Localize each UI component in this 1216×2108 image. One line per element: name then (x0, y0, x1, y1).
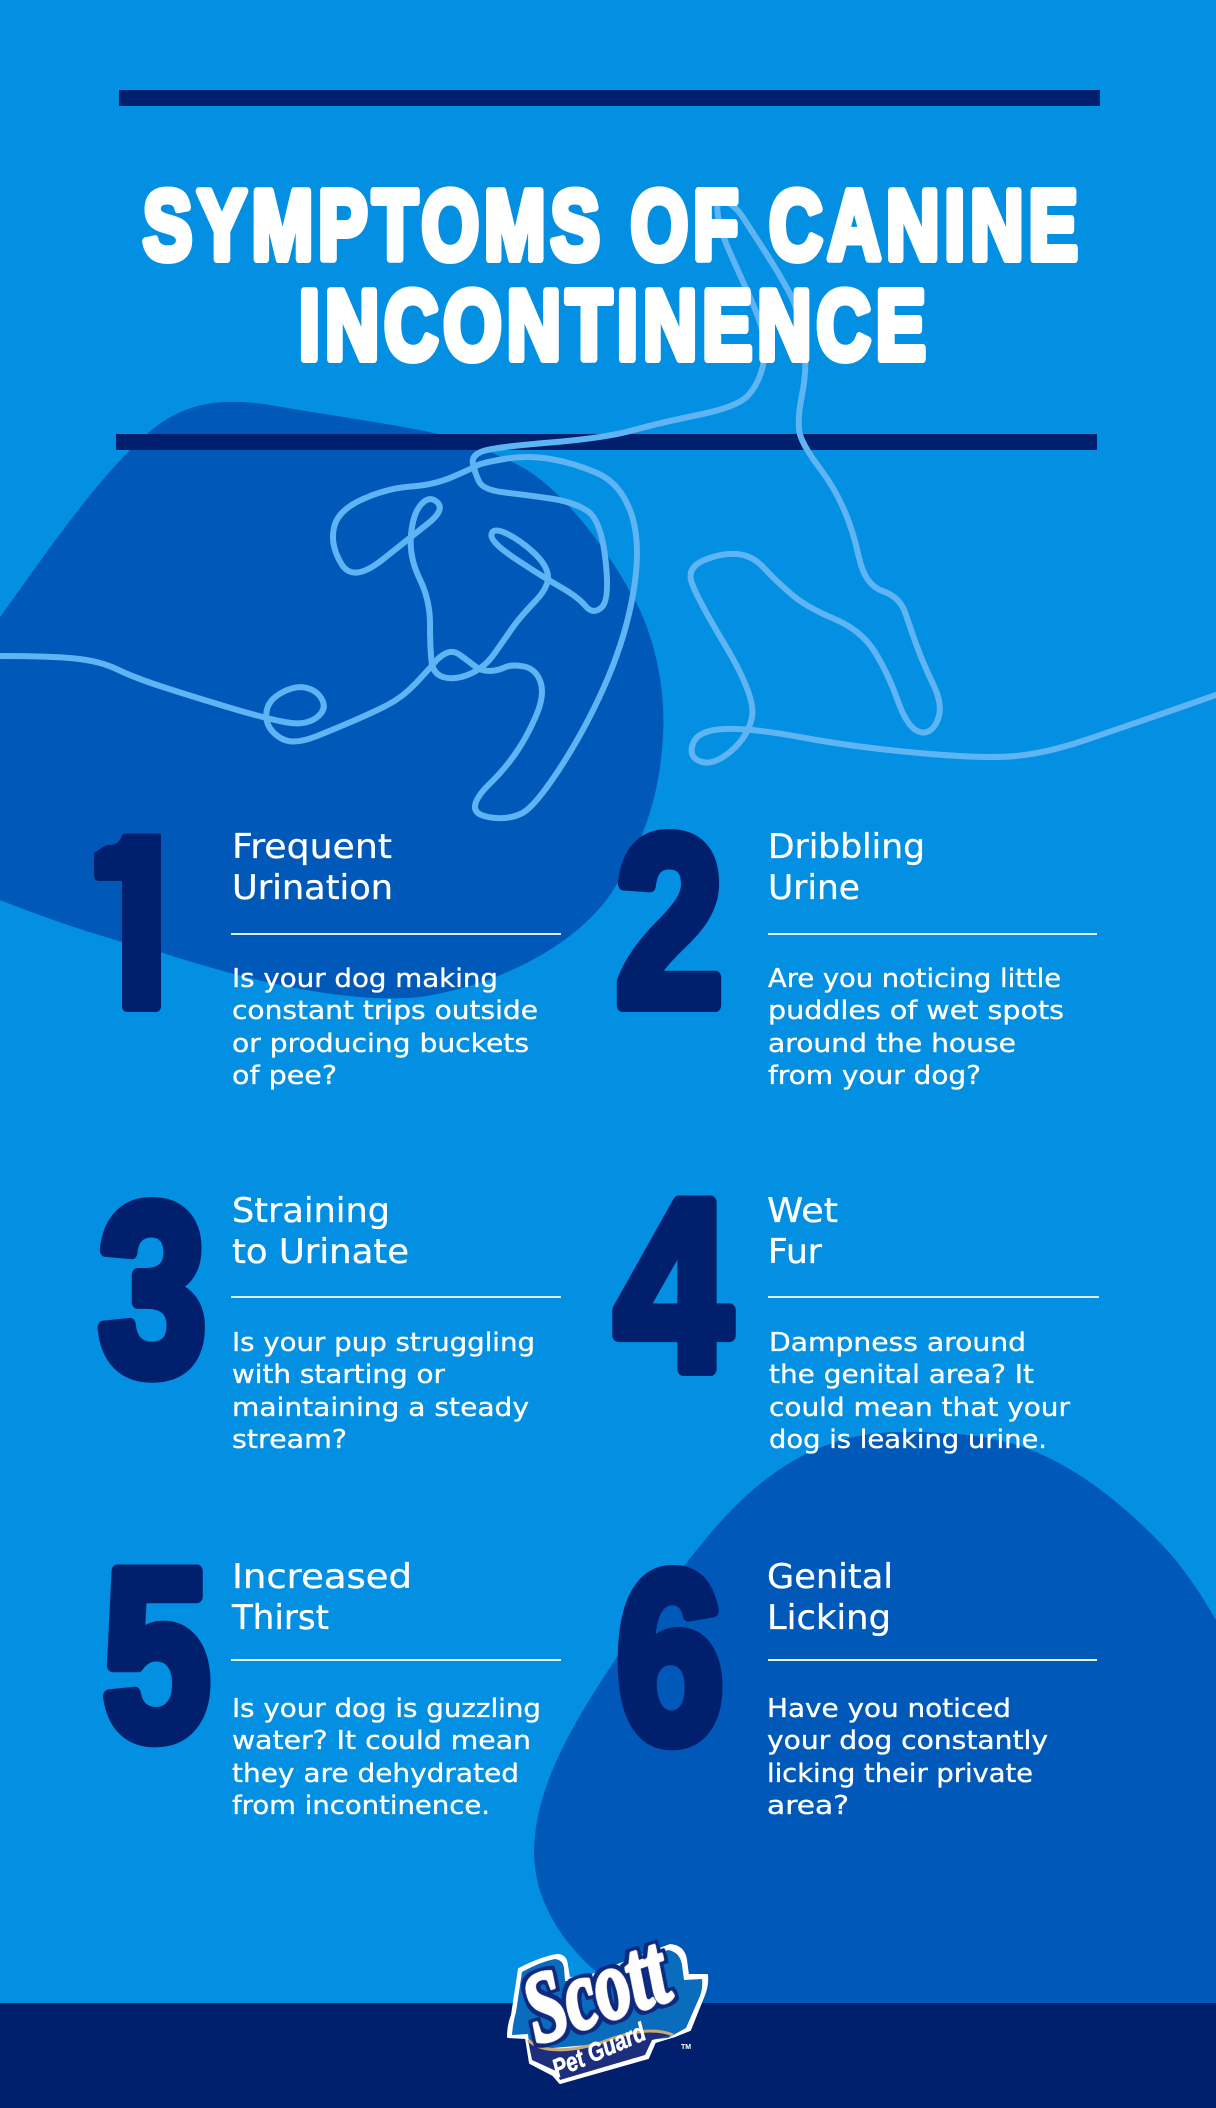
heading 6: Genital (767, 1557, 893, 1597)
body 3: stream? (232, 1425, 347, 1455)
heading 5: Increased (232, 1557, 412, 1597)
body 2: around the house (768, 1029, 1016, 1059)
blob: lower right background shape (534, 1432, 1216, 2010)
body 6: Have you noticed (767, 1694, 1011, 1724)
dog line illustration (0, 201, 1216, 818)
panel: symptom 4 (615, 1150, 1099, 1455)
body 1: of pee? (232, 1061, 337, 1091)
heading 6: Licking (767, 1598, 891, 1638)
body 2: Are you noticing little (768, 964, 1061, 994)
bottom title bar (116, 434, 1097, 450)
body 3: with starting or (232, 1360, 445, 1390)
title: INCONTINENCE (299, 270, 931, 380)
heading 5 (231, 1557, 412, 1638)
heading 4: Wet (767, 1191, 838, 1231)
body 1 (232, 964, 538, 1091)
logo swoosh (528, 2031, 673, 2080)
heading 2: Dribbling (768, 827, 925, 867)
heading 3: to Urinate (232, 1232, 409, 1272)
heading 5: Thirst (231, 1598, 329, 1638)
panel: symptom 2 (616, 787, 1097, 1091)
body 2: from your dog? (768, 1061, 981, 1091)
body 4: Dampness around (769, 1328, 1026, 1358)
body 5: from incontinence. (232, 1791, 490, 1821)
heading 6 (767, 1557, 893, 1638)
panel: symptom 1 (94, 832, 561, 1090)
panel: symptom 5 (103, 1520, 561, 1821)
body 4: the genital area? It (769, 1360, 1034, 1390)
logo gold curve (528, 2031, 673, 2050)
logo wordmark: Scott (509, 1913, 684, 2065)
title (143, 170, 1083, 380)
body 6: your dog constantly (767, 1726, 1048, 1756)
body 1: or producing buckets (232, 1029, 529, 1059)
body 3: Is your pup struggling (232, 1328, 535, 1358)
heading 2 (768, 827, 925, 908)
body 3: maintaining a steady (232, 1393, 529, 1423)
footer band (0, 2003, 1216, 2108)
body 6: licking their private (767, 1759, 1033, 1789)
heading 4: Fur (768, 1232, 822, 1272)
body 6: area? (767, 1791, 849, 1821)
body 5 (232, 1694, 541, 1821)
body 4 (769, 1328, 1070, 1455)
heading 2: Urine (768, 868, 860, 908)
number 2: 2 (616, 787, 723, 1057)
body 5: water? It could mean (232, 1726, 531, 1756)
heading 3: Straining (232, 1191, 390, 1231)
body 6 (767, 1694, 1048, 1821)
body 1: constant trips outside (232, 996, 538, 1026)
body 1: Is your dog making (232, 964, 498, 994)
number 1: 1 (68, 789, 202, 1059)
logo ribbon outline (508, 1945, 707, 2083)
logo: Scott Pet Guard (508, 1913, 707, 2084)
number 3: 3 (99, 1155, 206, 1425)
panel: symptom 6 (616, 1523, 1097, 1821)
body 4: could mean that your (769, 1393, 1070, 1423)
heading 3 (232, 1191, 409, 1272)
logo sub wordmark: Pet Guard (547, 2016, 651, 2084)
heading 1 (232, 827, 393, 908)
body 5: Is your dog is guzzling (232, 1694, 541, 1724)
body 4: dog is leaking urine. (769, 1425, 1047, 1455)
number 5: 5 (103, 1520, 210, 1790)
heading 4 (767, 1191, 838, 1272)
panel: symptom 3 (99, 1155, 561, 1455)
trademark: TM (681, 2044, 691, 2051)
body 2: puddles of wet spots (768, 996, 1064, 1026)
number 6: 6 (616, 1523, 724, 1793)
top title bar (119, 90, 1100, 106)
heading 1: Frequent (232, 827, 392, 867)
blob: upper left background shape (0, 402, 663, 998)
body 2 (768, 964, 1064, 1091)
number 4: 4 (615, 1150, 731, 1420)
logo ribbon body (512, 1950, 702, 2050)
body 5: they are dehydrated (232, 1759, 519, 1789)
heading 1: Urination (232, 868, 393, 908)
body 3 (232, 1328, 535, 1455)
